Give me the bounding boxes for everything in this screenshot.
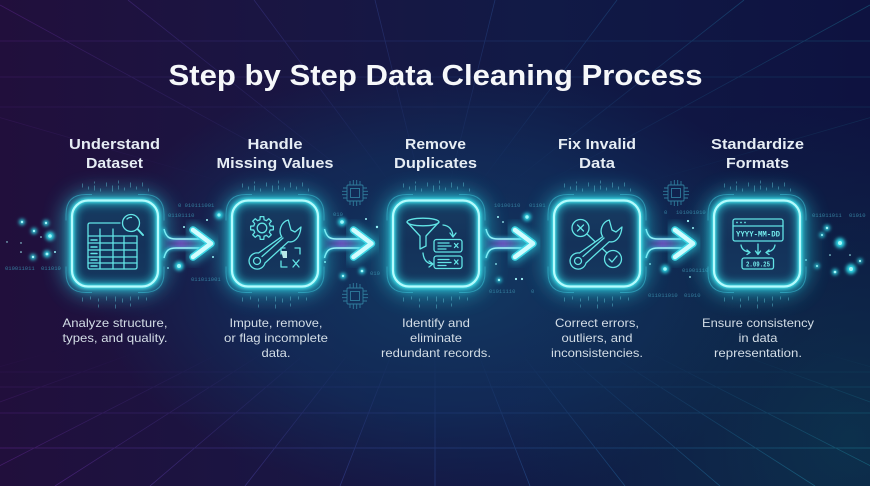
arrow: step 4 to 5 — [642, 228, 693, 259]
description: redundant records. — [381, 346, 491, 360]
binary data decorations: 011011011 — [812, 212, 842, 219]
icon: chip top centre — [342, 180, 368, 206]
binary data decorations: 01010 — [684, 292, 701, 299]
heading — [558, 136, 636, 172]
binary data decorations: 01011110 — [489, 288, 515, 295]
description: eliminate — [410, 331, 462, 345]
heading: Missing Values — [216, 155, 334, 172]
binary data decorations: 01001110 — [682, 267, 708, 274]
description: data. — [262, 346, 290, 360]
arrow: step 1 to 2 — [160, 228, 211, 259]
description: inconsistencies. — [551, 346, 643, 360]
card — [66, 180, 164, 308]
binary data decorations: 01101110 — [168, 212, 194, 219]
binary data decorations — [5, 202, 866, 299]
binary data decorations: 010 — [370, 270, 380, 277]
panel: standardize formats — [702, 136, 814, 360]
panel: fix invalid data — [548, 136, 646, 360]
description — [702, 316, 814, 360]
binary data decorations: 010011011 — [5, 265, 35, 272]
description — [62, 316, 168, 345]
description: representation. — [714, 346, 802, 360]
heading: Remove — [405, 136, 466, 153]
binary data decorations: 011011010 — [648, 292, 678, 299]
heading: Data — [579, 155, 616, 172]
icon: chip bottom centre — [342, 283, 368, 309]
heading: Fix Invalid — [558, 136, 636, 153]
description — [224, 316, 328, 360]
heading: Standardize — [711, 136, 804, 153]
description — [381, 316, 491, 360]
description: Correct errors, — [555, 316, 639, 330]
panel: remove duplicates — [381, 136, 491, 360]
heading — [69, 136, 160, 172]
icon: gear, wrench and missing cell — [249, 217, 301, 269]
binary data decorations: 0 010111001 — [178, 202, 215, 209]
icon: chip top right — [663, 180, 689, 206]
binary data decorations: 101001010 — [676, 209, 706, 216]
arrow: step 2 to 3 — [320, 228, 372, 259]
binary data decorations: 0 — [531, 288, 534, 295]
description — [551, 316, 643, 360]
heading: Handle — [248, 136, 302, 153]
heading: Understand — [69, 136, 160, 153]
icon: table with magnifier — [88, 214, 143, 269]
arrow: step 3 to 4 — [482, 228, 533, 259]
binary data decorations: 01101 — [529, 202, 546, 209]
panel: understand dataset — [62, 136, 168, 345]
panel: handle missing values — [216, 136, 334, 360]
icon: wrench, error and check — [570, 220, 622, 269]
title: Step by Step Data Cleaning Process — [168, 60, 702, 92]
heading — [216, 136, 334, 172]
binary data decorations: 010 — [333, 211, 343, 218]
description: Analyze structure, — [62, 316, 168, 330]
heading: Dataset — [86, 155, 143, 172]
heading: Duplicates — [394, 155, 477, 172]
description: Ensure consistency — [702, 316, 814, 330]
description: Impute, remove, — [230, 316, 322, 330]
icon: funnel and records — [407, 218, 462, 268]
card — [708, 180, 806, 308]
binary data decorations: 10100110 — [494, 202, 520, 209]
glowing particles — [6, 211, 863, 282]
card — [226, 180, 324, 308]
binary data decorations: 0 — [664, 209, 667, 216]
heading — [394, 136, 477, 172]
heading: Formats — [726, 155, 789, 172]
description: types, and quality. — [62, 331, 168, 345]
description: Identify and — [402, 316, 470, 330]
card — [548, 180, 646, 308]
heading — [711, 136, 804, 172]
icon: date format: 2.09.25 — [746, 262, 770, 270]
description: in data — [738, 331, 778, 345]
binary data decorations: 011010 — [41, 265, 61, 272]
icon: date format: YYYY-MM-DD — [736, 230, 780, 240]
description: outliers, and — [562, 331, 632, 345]
card — [387, 180, 485, 308]
description: or flag incomplete — [224, 331, 328, 345]
icon: date format — [733, 219, 783, 270]
binary data decorations: 011011001 — [191, 276, 221, 283]
binary data decorations: 01010 — [849, 212, 866, 219]
